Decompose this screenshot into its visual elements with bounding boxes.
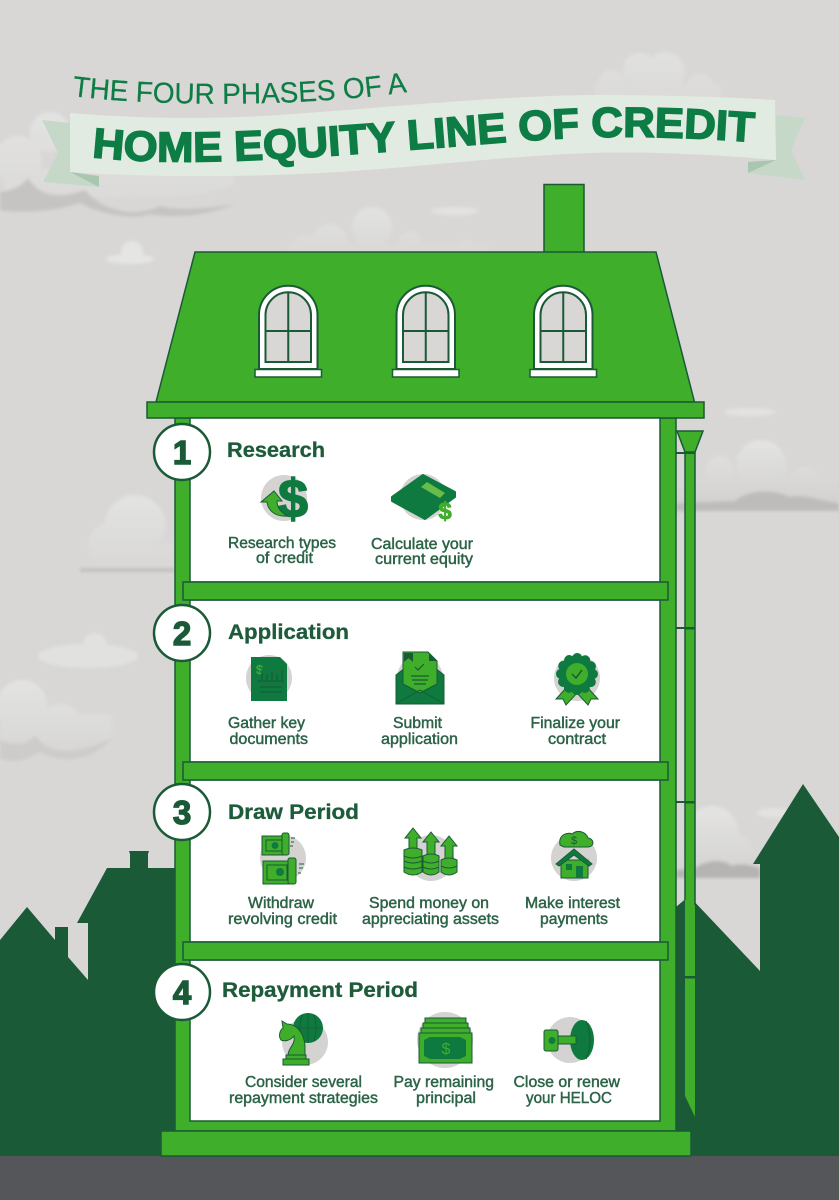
house	[147, 184, 704, 1156]
floor panel backgrounds	[190, 418, 660, 1121]
icon: documents: $	[256, 662, 264, 677]
label: Gather key documents: Gather key	[228, 715, 305, 732]
label: Consider several repayment strategies: Consider several	[245, 1074, 362, 1091]
cloud: small left	[106, 241, 154, 264]
icon: house with money cloud	[551, 831, 597, 881]
label: Withdraw revolving credit: revolving credit	[228, 911, 338, 928]
phase 3: Draw Period	[154, 784, 621, 928]
roof	[156, 252, 694, 402]
main title: HOME EQUITY LINE OF CREDIT	[94, 106, 756, 168]
heading: Repayment Period: Repayment Period	[222, 979, 418, 1002]
icon: key and lock	[544, 1017, 594, 1063]
cloud: small sky wisp	[431, 207, 479, 215]
banner fold shadows	[70, 160, 776, 187]
chimney	[544, 184, 584, 252]
number badge 3: 3	[173, 794, 191, 831]
number badge 2: 2	[173, 615, 191, 652]
roof cornice	[147, 402, 704, 418]
foundation	[161, 1131, 691, 1156]
number badge 3	[154, 784, 210, 840]
icon: chess knight and globe	[280, 1013, 328, 1065]
neighbouring houses silhouette: right	[676, 784, 839, 1156]
subtitle: THE FOUR PHASES OF A	[74, 73, 408, 104]
icon: house with money cloud: $	[571, 835, 577, 847]
label: Spend money on appreciating assets: Spend money on	[369, 895, 489, 912]
cloud shadow: left middle	[80, 568, 175, 572]
label: Close or renew your HELOC: your HELOC	[526, 1090, 612, 1107]
label: Gather key documents: documents	[230, 731, 308, 748]
label: Make interest payments: payments	[540, 911, 608, 928]
label: Research types of credit: Research types	[228, 535, 336, 552]
cloud shadow: right middle	[676, 491, 839, 511]
cloud shadow: right lower	[676, 861, 760, 878]
cloud: right wisp	[724, 408, 776, 416]
label: Pay remaining principal: principal	[416, 1090, 476, 1107]
house walls	[175, 418, 676, 1131]
cloud: right lower	[676, 806, 793, 869]
icon: coin stacks with arrows	[404, 828, 457, 881]
window 2	[392, 286, 459, 377]
banner left tail	[42, 120, 99, 187]
cloud: left low	[38, 633, 138, 668]
icon: revolving credit cash	[260, 833, 306, 884]
window 3	[530, 286, 596, 377]
neighbouring houses silhouette: left	[0, 851, 176, 1156]
icon: contract rosette	[554, 655, 600, 705]
floor bands	[183, 582, 668, 960]
label: Calculate your current equity: Calculate your	[371, 536, 473, 553]
number badge 4	[154, 964, 210, 1020]
label: Pay remaining principal: Pay remaining	[394, 1074, 494, 1091]
cloud shadow: lower left	[0, 735, 112, 761]
icon: stack of bills	[417, 1012, 473, 1068]
cloud: lower left	[0, 680, 112, 752]
cloud shadow: top left	[0, 178, 235, 217]
phase 2: Application	[154, 605, 620, 748]
icon: documents	[246, 655, 292, 701]
label: Submit application: Submit	[393, 715, 443, 732]
downpipe	[676, 431, 703, 1117]
phase 1: Research	[154, 424, 473, 568]
heading: Application: Application	[228, 621, 349, 644]
background clouds	[0, 52, 839, 878]
number badge 4: 4	[173, 974, 192, 1011]
label: Withdraw revolving credit: Withdraw	[248, 895, 315, 912]
cloud: top left	[0, 112, 235, 201]
banner ribbon	[70, 95, 776, 176]
icon: dollar with arrow	[261, 469, 308, 529]
label: Research types of credit: of credit	[256, 550, 314, 567]
label: Close or renew your HELOC: Close or renew	[514, 1074, 621, 1091]
label: Calculate your current equity: current equity	[375, 551, 473, 568]
label: Finalize your contract: contract	[548, 731, 607, 748]
window 1	[255, 286, 322, 377]
label: Make interest payments: Make interest	[525, 895, 621, 912]
cloud: top right	[595, 52, 720, 102]
icon: calculator: $	[438, 498, 452, 525]
banner right tail	[748, 115, 805, 180]
heading: Draw Period: Draw Period	[228, 801, 359, 824]
label: Consider several repayment strategies: repayment strategies	[229, 1090, 378, 1107]
icon: dollar with arrow: $	[278, 469, 308, 529]
number badge 1: 1	[173, 434, 191, 471]
number badge 1	[154, 424, 210, 480]
label: Submit application: application	[381, 731, 458, 748]
icon: calculator	[392, 474, 455, 525]
label: Finalize your contract: Finalize your	[530, 715, 620, 732]
cloud: left middle	[88, 495, 175, 569]
phase 4: Repayment Period	[154, 964, 621, 1107]
number badge 2	[154, 605, 210, 661]
icon: stack of bills: $	[442, 1041, 451, 1058]
road	[0, 1156, 839, 1200]
cloud: behind roof	[288, 207, 488, 264]
icon: submit envelope	[396, 652, 444, 704]
label: Spend money on appreciating assets: appreciating assets	[362, 911, 499, 928]
cloud: right middle	[676, 440, 839, 502]
heading: Research: Research	[227, 439, 325, 462]
title banner	[42, 73, 805, 187]
